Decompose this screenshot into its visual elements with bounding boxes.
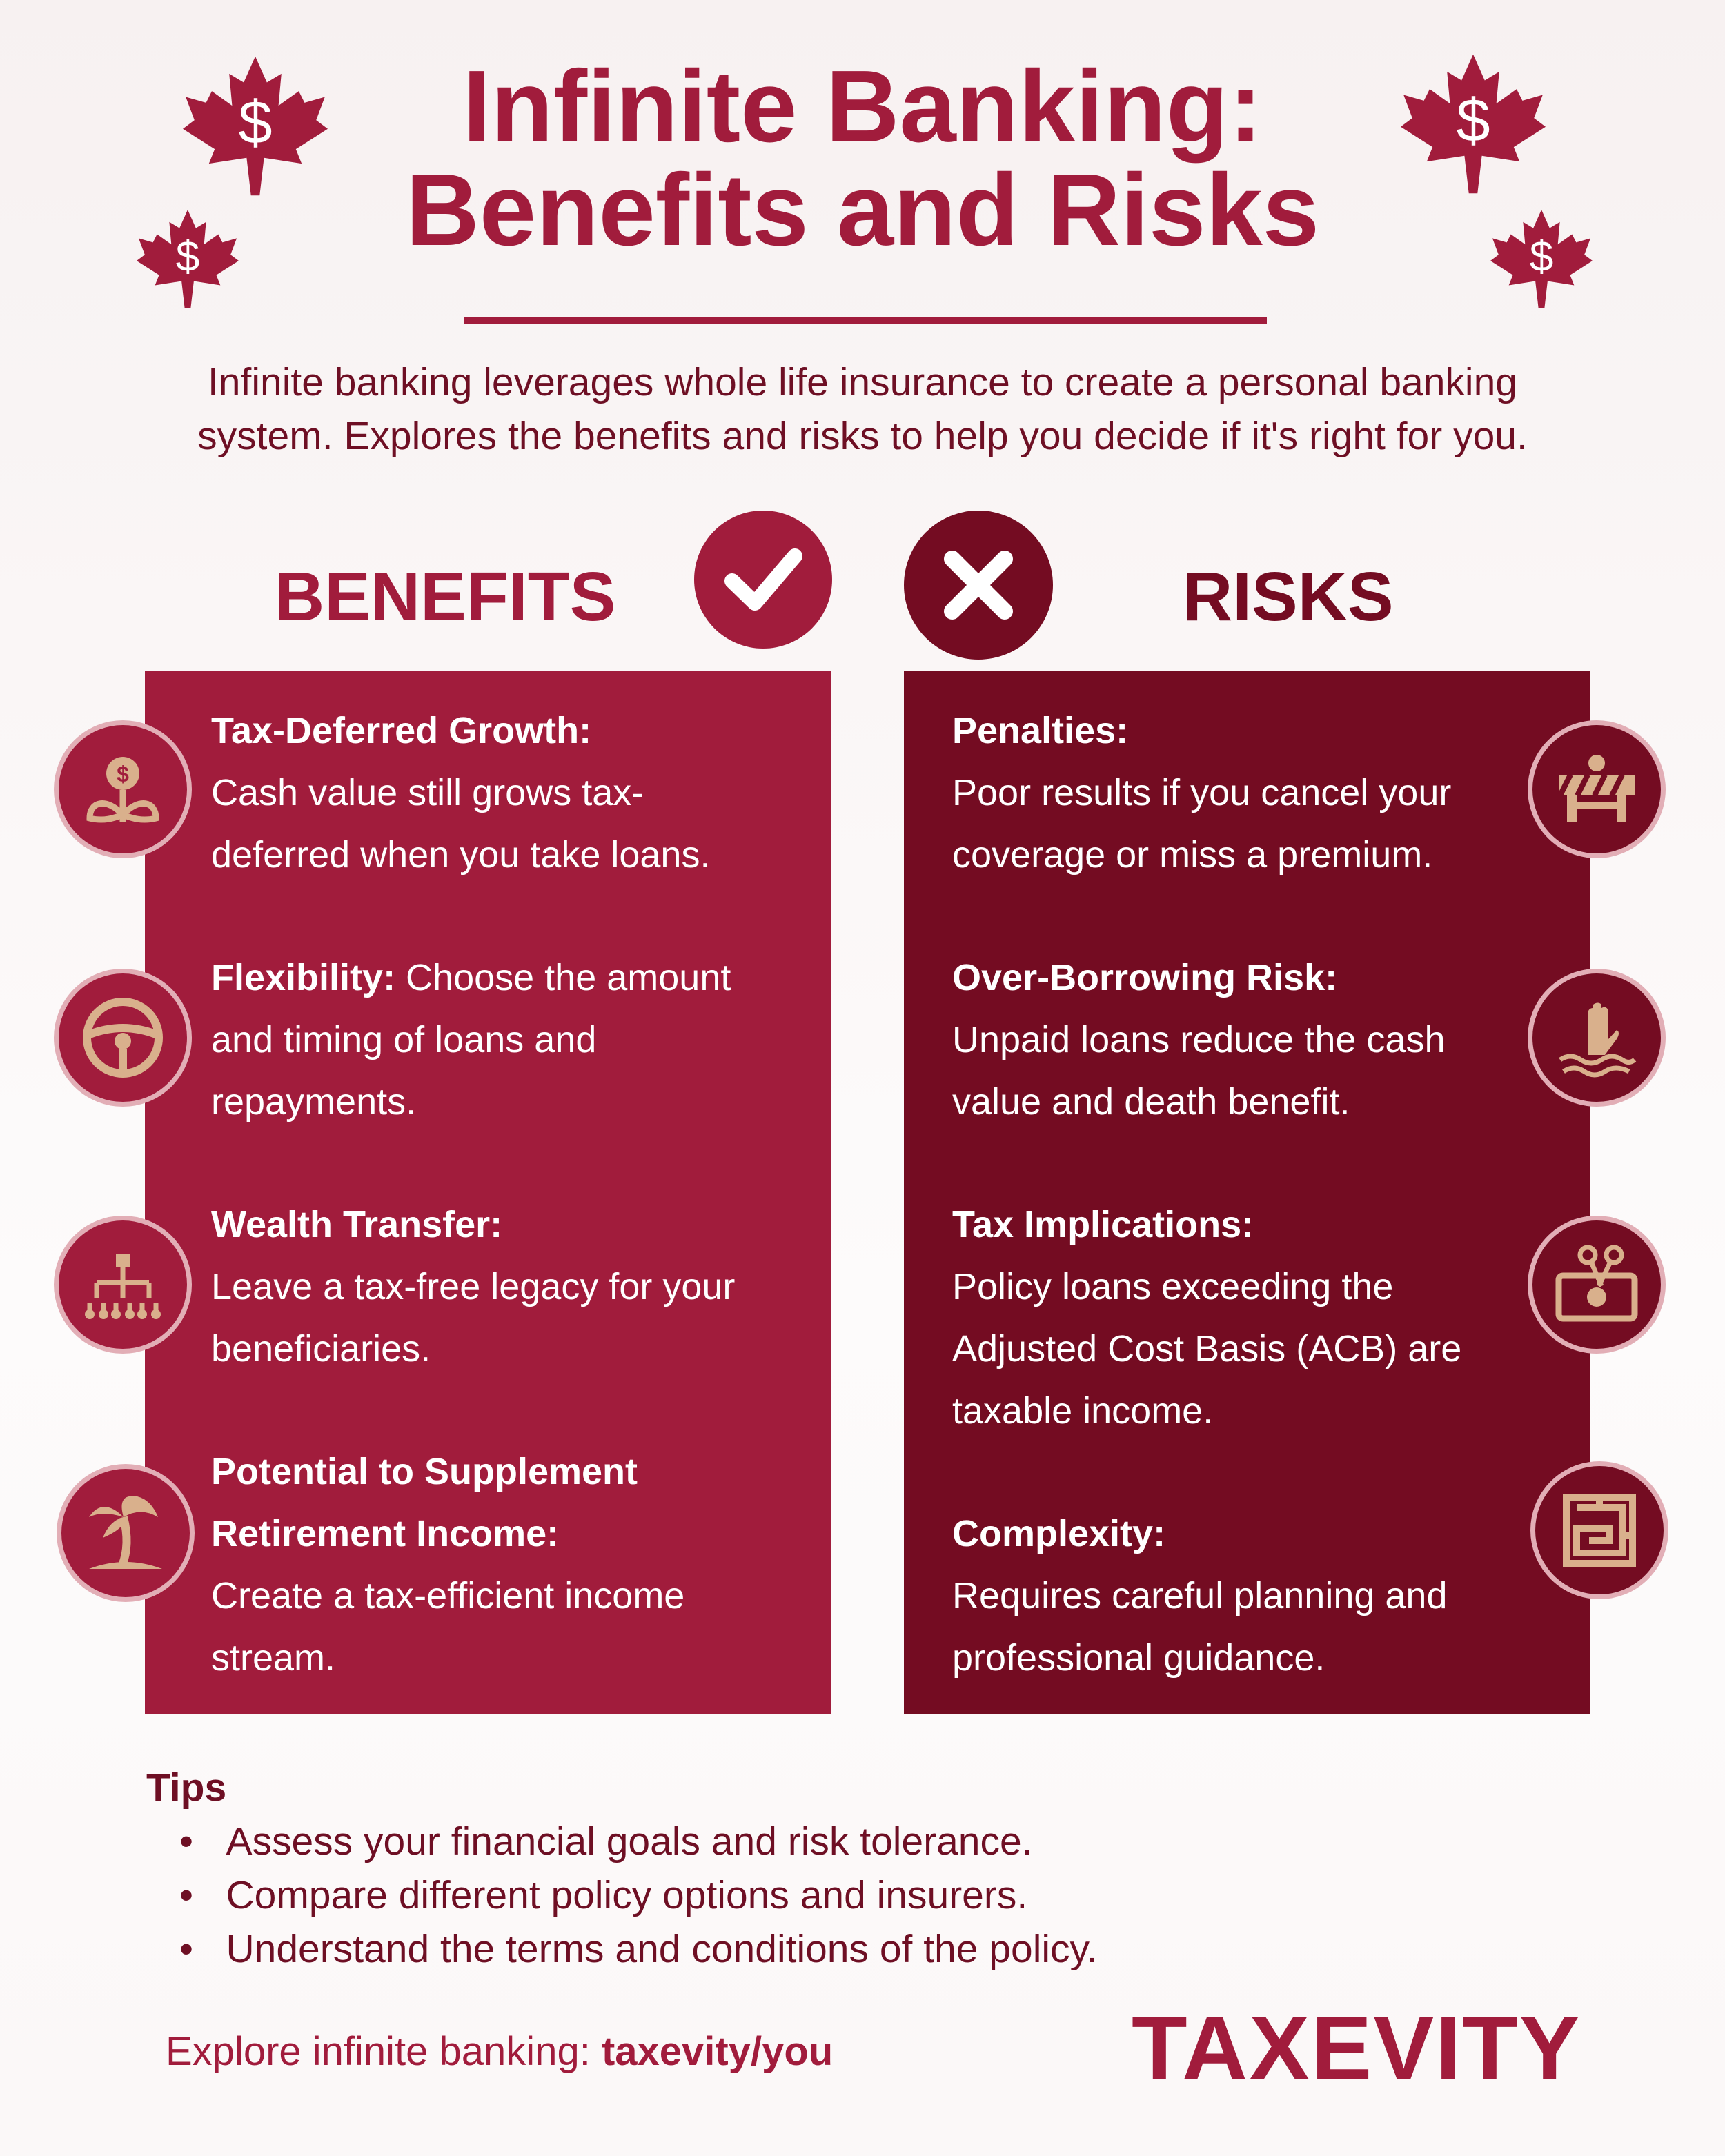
icon: maple leaf large left: $	[238, 88, 273, 157]
risk: complexity: professional guidance.	[952, 1637, 1325, 1679]
subtitle	[197, 360, 1528, 458]
risk: over-borrowing	[952, 957, 1445, 1122]
icon: maple leaf small left: $	[176, 233, 199, 281]
benefit: wealth transfer: Leave a tax-free legacy for your	[211, 1266, 735, 1307]
title: Benefits and Risks	[406, 153, 1319, 267]
title	[406, 50, 1319, 267]
icon: maze	[1530, 1461, 1668, 1599]
icon: maple leaf small left	[137, 210, 239, 308]
title underline	[464, 317, 1267, 324]
risk: penalties: coverage or miss a premium.	[952, 834, 1432, 876]
benefit: flexibility	[211, 957, 731, 1122]
heading: risks: RISKS	[1183, 558, 1394, 635]
risk: over-borrowing: Over-Borrowing Risk:	[952, 957, 1337, 998]
icon: maple leaf large left	[183, 57, 328, 196]
icon: maple leaf large right	[1401, 54, 1546, 193]
benefit: flexibility: repayments.	[211, 1081, 416, 1122]
tips section: Tips	[146, 1766, 226, 1810]
benefit: retirement income	[211, 1451, 684, 1679]
icon: money plant	[54, 720, 192, 858]
tips section	[146, 1766, 1098, 1971]
risk: tax implications: Tax Implications:	[952, 1204, 1254, 1245]
benefit: retirement income: Potential to Supplement	[211, 1451, 638, 1492]
benefit: wealth transfer: beneficiaries.	[211, 1328, 431, 1369]
benefit: tax-deferred growth: Tax-Deferred Growth:	[211, 710, 591, 751]
benefit: retirement income: Retirement Income:	[211, 1513, 559, 1554]
benefit: tax-deferred growth: deferred when you take loans.	[211, 834, 710, 876]
icon: maple leaf small right: $	[1530, 233, 1553, 281]
icon: maple leaf small right	[1490, 210, 1593, 308]
benefit: retirement income: stream.	[211, 1637, 335, 1679]
benefit: retirement income: Create a tax-efficient income	[211, 1575, 684, 1616]
risk: tax implications: Policy loans exceeding the	[952, 1266, 1393, 1307]
risk: complexity	[952, 1513, 1447, 1679]
icon: check circle	[694, 511, 832, 649]
title: Infinite Banking:	[462, 50, 1263, 164]
risk: over-borrowing: Unpaid loans reduce the cash	[952, 1019, 1445, 1060]
footer link text: Explore infinite banking: taxevity/you	[166, 2029, 833, 2074]
subtitle: Infinite banking leverages whole life insurance to create a personal banking	[208, 360, 1517, 404]
icon: palm tree	[57, 1464, 195, 1602]
benefit: tax-deferred growth: Cash value still grows tax-	[211, 772, 644, 813]
benefit: wealth transfer	[211, 1204, 735, 1369]
risk: complexity: Complexity:	[952, 1513, 1165, 1554]
risk: penalties: Poor results if you cancel your	[952, 772, 1451, 813]
risk: tax implications: taxable income.	[952, 1390, 1213, 1432]
icon: barrier	[1528, 720, 1666, 858]
icon: drowning hand	[1528, 969, 1666, 1107]
tips section: • Compare different policy options and insurers.	[179, 1873, 1027, 1917]
risk: tax implications	[952, 1204, 1461, 1432]
icon: money plant: $	[117, 762, 129, 787]
risk: penalties	[952, 710, 1451, 876]
benefit: wealth transfer: Wealth Transfer:	[211, 1204, 502, 1245]
risk: complexity: Requires careful planning and	[952, 1575, 1447, 1616]
icon: x circle	[904, 511, 1053, 660]
icon: hierarchy	[54, 1216, 192, 1354]
icon: steering wheel	[54, 969, 192, 1107]
icon: maple leaf large right: $	[1456, 86, 1490, 155]
benefit: flexibility: Flexibility: Choose the amount	[211, 957, 731, 998]
tips section: • Assess your financial goals and risk tolerance.	[179, 1819, 1033, 1863]
risk: over-borrowing: value and death benefit.	[952, 1081, 1350, 1122]
logo: TAXEVITY: TAXEVITY	[1132, 1997, 1581, 2099]
panel: risks	[904, 671, 1590, 1714]
risk: tax implications: Adjusted Cost Basis (ACB) are	[952, 1328, 1461, 1369]
heading: benefits: BENEFITS	[275, 558, 615, 635]
panel: benefits	[145, 671, 831, 1714]
risk: penalties: Penalties:	[952, 710, 1128, 751]
subtitle: system. Explores the benefits and risks to help you decide if it's right for you.	[197, 414, 1528, 458]
benefit: tax-deferred growth	[211, 710, 710, 876]
benefit: flexibility: and timing of loans and	[211, 1019, 596, 1060]
icon: cash scissors	[1528, 1216, 1666, 1354]
tips section: • Understand the terms and conditions of the policy.	[179, 1927, 1098, 1971]
